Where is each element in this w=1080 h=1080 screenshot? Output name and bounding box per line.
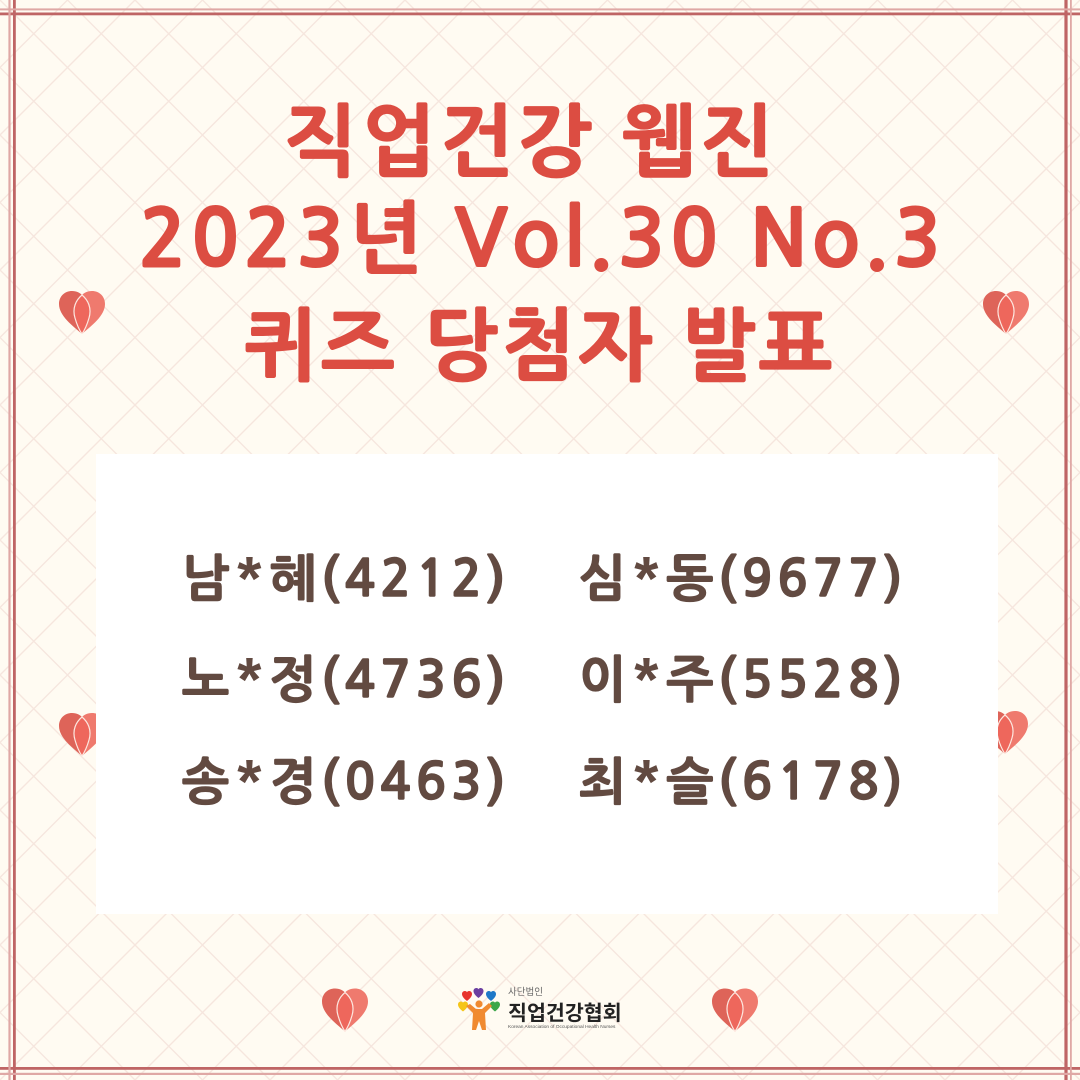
title: 퀴즈 당첨자 발표 (244, 307, 836, 385)
icon: heart middle left (59, 713, 96, 756)
text: English association name: Korean Association of Occupational Health Nurses (508, 1025, 615, 1030)
icon: heart top left (59, 291, 105, 334)
icon: heart top right (983, 291, 1029, 334)
winner: 최*슬: 최*슬(6178) (579, 748, 907, 817)
winner: 송*경: 송*경(0463) (182, 748, 510, 817)
icon: heart bottom left (322, 988, 368, 1032)
title: 2023년 Vol.30 No.3 (139, 200, 946, 278)
winner: 노*정: 노*정(4736) (182, 646, 510, 715)
winner: 남*혜: 남*혜(4212) (182, 545, 510, 614)
icon: heart middle right (998, 711, 1028, 754)
winner: 이*주: 이*주(5528) (579, 646, 907, 715)
icon: logo figure with hearts (458, 988, 500, 1030)
title (139, 102, 946, 385)
icon: heart bottom right (712, 988, 758, 1032)
logo: Korean Association of Occupational Health Nurses (458, 984, 622, 1030)
text: 직업건강협회: 직업건강협회 (508, 996, 622, 1026)
winner: 심*동: 심*동(9677) (579, 545, 907, 614)
title: 직업건강 웹진 (284, 103, 779, 181)
text: 사단법인: 사단법인 (508, 984, 543, 998)
panel: winners list (96, 454, 998, 914)
